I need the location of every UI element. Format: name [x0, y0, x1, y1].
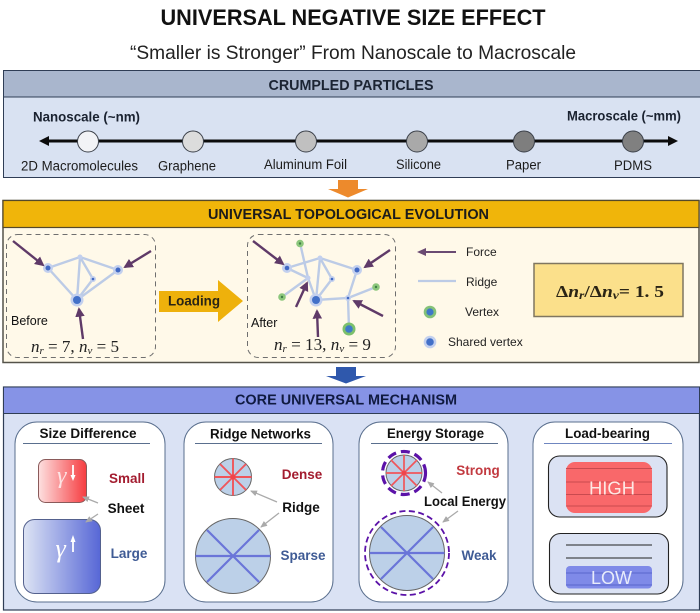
subtitle: “Smaller is Stronger” From Nanoscale to Macroscale: [130, 42, 576, 64]
particle markers: [78, 131, 644, 152]
before equation: = 5: [92, 337, 119, 356]
after label: After: [251, 316, 277, 330]
large sheet: [24, 520, 100, 594]
macroscale label: Macroscale (~mm): [567, 108, 681, 124]
heading: energy storage: Energy Storage: [387, 426, 484, 441]
after equation: = 13,: [287, 335, 331, 354]
dense ridge circle: [214, 458, 252, 496]
high load box: [548, 456, 667, 517]
label: sheet: Sheet: [108, 501, 145, 516]
sparse ridge circle: [196, 518, 270, 594]
after equation: r: [283, 344, 288, 355]
label: strong: Strong: [456, 463, 500, 478]
ridges before: [48, 257, 118, 300]
ratio callout: r: [579, 288, 585, 302]
heading: load-bearing: Load-bearing: [565, 426, 650, 441]
card: load-bearing: [533, 422, 683, 602]
after equation: = 9: [344, 335, 371, 354]
ratio callout: n: [602, 282, 613, 301]
header: topological evolution: UNIVERSAL TOPOLOGICAL EVOLUTION: [208, 207, 489, 223]
title: UNIVERSAL NEGATIVE SIZE EFFECT: [160, 5, 546, 30]
before equation: = 7,: [44, 337, 79, 356]
ridges after: [282, 243, 376, 329]
card: size difference: [15, 422, 165, 602]
weak energy circle: [365, 511, 449, 595]
particle labels: Silicone: [396, 157, 441, 172]
arrow: loading: [159, 280, 243, 322]
legend: vertex: Vertex: [465, 305, 499, 319]
legend: [417, 245, 523, 349]
vertices before: [43, 254, 123, 306]
ratio callout: = 1. 5: [619, 282, 664, 301]
small sheet: γ: [57, 463, 67, 489]
ratio callout: /Δ: [583, 282, 602, 301]
small sheet: [38, 460, 86, 502]
forces before: [13, 241, 151, 339]
after equation: n: [274, 335, 282, 354]
particle labels: Paper: [506, 158, 541, 172]
panel: core mechanism: [4, 387, 700, 610]
header: crumpled particles: [4, 70, 700, 97]
legend: shared vertex: Shared vertex: [448, 335, 523, 349]
low load box: LOW: [591, 568, 632, 588]
before network box: [6, 234, 156, 358]
after equation: v: [339, 344, 345, 355]
label: sparse: Sparse: [280, 548, 326, 563]
arrow: loading: Loading: [168, 292, 220, 308]
particle labels: [21, 157, 652, 174]
large sheet: γ: [56, 534, 66, 563]
after equation: n: [331, 335, 339, 354]
scale axis: [39, 136, 678, 146]
header: topological evolution: [3, 200, 699, 228]
label: large: Large: [111, 546, 148, 561]
low load box: [550, 534, 668, 594]
card: ridge networks: [184, 422, 333, 602]
strong energy circle: [382, 452, 426, 494]
before equation: v: [87, 346, 93, 357]
pointers: sheet: [83, 497, 98, 522]
label: small: Small: [109, 471, 145, 486]
ratio callout: [534, 264, 683, 316]
heading: size difference: Size Difference: [40, 426, 137, 441]
panel: topological evolution: [3, 200, 699, 362]
card: energy storage: [359, 422, 508, 602]
arrow: blue down: [326, 367, 366, 384]
ratio callout: Δn: [556, 282, 578, 301]
before equation: n: [79, 337, 87, 356]
vertices after: [278, 240, 380, 336]
before equation: r: [40, 346, 45, 357]
arrow: orange down: [328, 180, 368, 198]
label: dense: Dense: [282, 467, 323, 482]
particle labels: PDMS: [614, 158, 652, 173]
header: core mechanism: [4, 387, 700, 414]
panel: crumpled particles: [4, 70, 700, 178]
legend: ridge: Ridge: [466, 275, 498, 289]
label: ridge: Ridge: [282, 500, 320, 515]
high load box: HIGH: [589, 478, 635, 498]
particle labels: 2D Macromolecules: [21, 158, 138, 174]
heading: ridge networks: Ridge Networks: [210, 426, 311, 442]
legend: force: Force: [466, 245, 497, 259]
before equation: n: [31, 337, 39, 356]
nanoscale label: Nanoscale (~nm): [33, 110, 140, 124]
after network box: [248, 234, 396, 358]
label: weak: Weak: [461, 548, 497, 563]
ratio callout: v: [613, 288, 620, 302]
before label: Before: [11, 314, 48, 328]
forces after: [253, 241, 390, 337]
particle labels: Graphene: [158, 158, 216, 174]
header: crumpled particles: CRUMPLED PARTICLES: [268, 77, 434, 94]
header: core mechanism: CORE UNIVERSAL MECHANISM: [235, 392, 457, 408]
particle labels: Aluminum Foil: [264, 157, 347, 172]
label: local energy: Local Energy: [424, 494, 506, 509]
pointers: ridge: [251, 491, 279, 527]
pointers: local energy: [428, 482, 458, 522]
